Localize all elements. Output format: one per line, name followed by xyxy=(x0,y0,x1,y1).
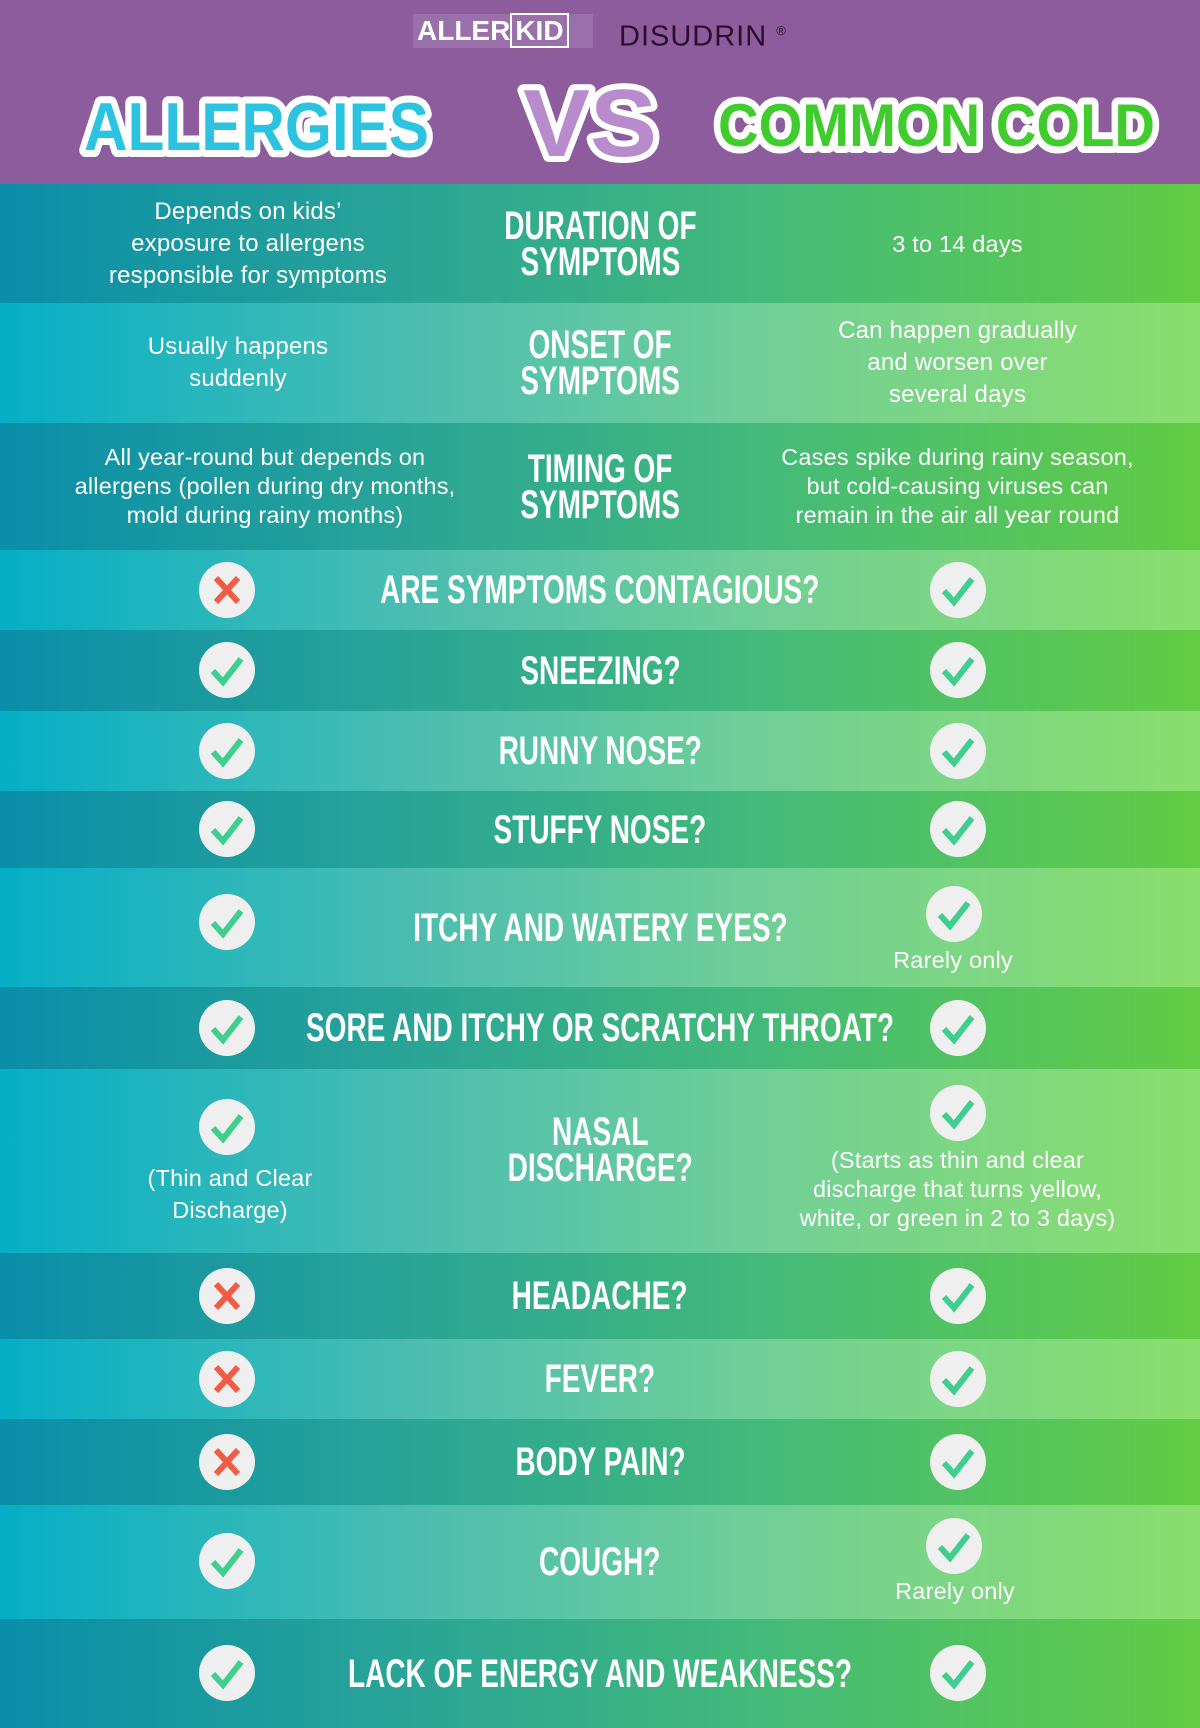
row: body pain xyxy=(0,1419,1200,1505)
title: vs: VS xyxy=(523,70,657,177)
row: timing: SYMPTOMS xyxy=(520,482,680,526)
row: nasal: Discharge) xyxy=(172,1197,288,1223)
row: duration: responsible for symptoms xyxy=(109,262,387,288)
row: nasal xyxy=(0,1069,1200,1253)
row: timing: mold during rainy months) xyxy=(127,502,403,528)
row: timing: TIMING OF xyxy=(528,446,672,490)
row: duration xyxy=(0,184,1200,303)
row: sneezing: SNEEZING? xyxy=(520,648,680,692)
row: fever xyxy=(0,1339,1200,1419)
row: nasal: NASAL xyxy=(552,1110,648,1154)
row: nasal: DISCHARGE? xyxy=(507,1146,693,1190)
row: timing: but cold-causing viruses can xyxy=(806,473,1109,499)
row: onset: suddenly xyxy=(189,365,287,392)
row: nasal: white, or green in 2 to 3 days) xyxy=(800,1205,1115,1231)
title: common cold: COMMON COLD xyxy=(718,92,1155,159)
row: energy: LACK OF ENERGY AND WEAKNESS? xyxy=(348,1652,852,1696)
row: stuffy xyxy=(0,791,1200,868)
row: headache xyxy=(0,1253,1200,1339)
row: onset xyxy=(0,303,1200,423)
row: itchy eyes xyxy=(0,868,1200,987)
row: onset: Can happen gradually xyxy=(838,317,1077,344)
row: headache: HEADACHE? xyxy=(512,1274,688,1318)
row: throat: SORE AND ITCHY OR SCRATCHY THROAT? xyxy=(306,1006,894,1050)
row: runny: RUNNY NOSE? xyxy=(498,729,702,773)
row: sneezing xyxy=(0,630,1200,711)
row: throat xyxy=(0,987,1200,1069)
row: itchy eyes: Rarely only xyxy=(893,947,1013,973)
row: itchy eyes: ITCHY AND WATERY EYES? xyxy=(413,906,787,950)
row: fever: FEVER? xyxy=(545,1357,655,1401)
row: duration: 3 to 14 days xyxy=(892,230,1023,256)
row: duration: Depends on kids’ xyxy=(154,198,342,224)
logo: disudrin: DISUDRIN ® xyxy=(619,21,787,53)
row: duration: exposure to allergens xyxy=(131,230,365,256)
row: timing xyxy=(0,423,1200,550)
row: onset: SYMPTOMS xyxy=(520,359,680,403)
row: contagious: ARE SYMPTOMS CONTAGIOUS? xyxy=(380,568,820,612)
row: nasal: (Starts as thin and clear xyxy=(831,1147,1084,1173)
row: body pain: BODY PAIN? xyxy=(515,1440,685,1484)
row: timing: allergens (pollen during dry months, xyxy=(75,473,455,499)
header xyxy=(0,0,1200,184)
row: cough: COUGH? xyxy=(539,1540,661,1584)
row: nasal: (Thin and Clear xyxy=(148,1165,312,1191)
row: stuffy: STUFFY NOSE? xyxy=(494,808,706,852)
row: onset: and worsen over xyxy=(867,349,1048,376)
row: timing: remain in the air all year round xyxy=(796,502,1119,528)
row: energy xyxy=(0,1619,1200,1728)
title xyxy=(79,70,1160,177)
row: timing: Cases spike during rainy season, xyxy=(781,444,1134,470)
row: duration: SYMPTOMS xyxy=(520,240,680,284)
row: cough: Rarely only xyxy=(895,1578,1015,1604)
row: contagious xyxy=(0,550,1200,630)
row: onset: several days xyxy=(889,381,1026,408)
row: duration: DURATION OF xyxy=(504,204,696,248)
row: nasal: discharge that turns yellow, xyxy=(813,1176,1102,1202)
row: timing: All year-round but depends on xyxy=(105,444,425,470)
row: onset: ONSET OF xyxy=(528,323,672,367)
row: runny xyxy=(0,711,1200,791)
title: allergies: ALLERGIES xyxy=(84,89,429,165)
row: onset: Usually happens xyxy=(148,333,328,360)
logo: allerkid: ALLERKID xyxy=(417,15,564,46)
row: cough xyxy=(0,1505,1200,1619)
